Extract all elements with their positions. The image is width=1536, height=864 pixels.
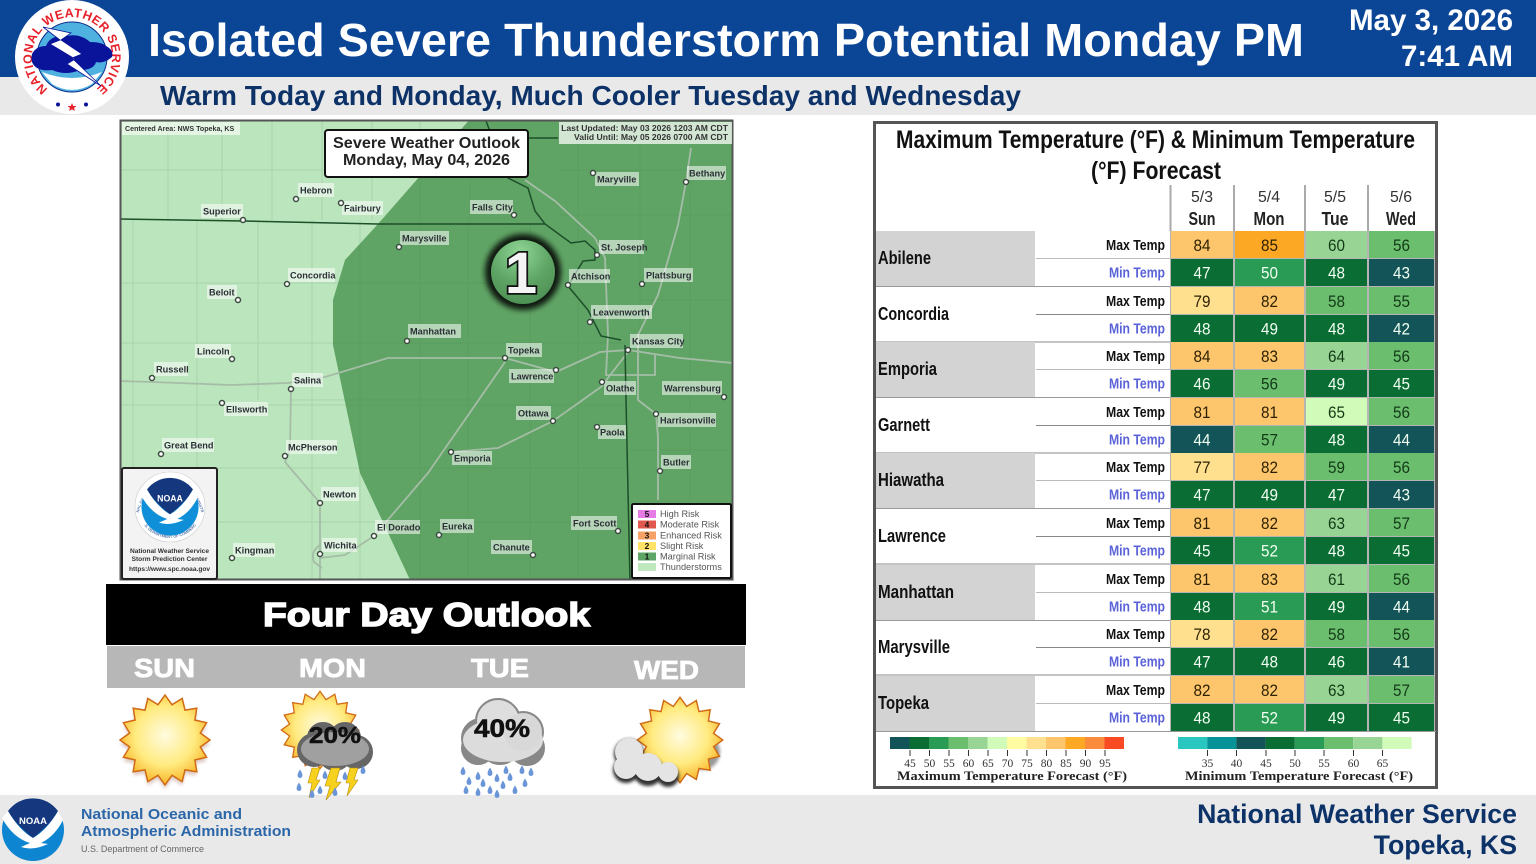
SPC NOAA logo box: U.S. DEPARTMENT OF COMMERCE bbox=[144, 524, 196, 538]
table row: Concordia: 49 bbox=[1261, 320, 1278, 338]
table row: Concordia: Min Temp bbox=[1109, 320, 1165, 338]
table row: Hiawatha: 47 bbox=[1328, 486, 1345, 504]
table row: Lawrence: Min Temp bbox=[1109, 542, 1165, 560]
map legend: Thunderstorms bbox=[660, 562, 722, 572]
table row: Topeka: 45 bbox=[1393, 708, 1410, 728]
table row: Manhattan: 81 bbox=[1194, 570, 1210, 589]
table row: Garnett: 81 bbox=[1194, 403, 1210, 422]
table column headers: 5/4 bbox=[1258, 189, 1280, 206]
city labels: Newton bbox=[323, 490, 357, 500]
city labels: Fort Scott bbox=[573, 518, 616, 528]
table row: Concordia: 48 bbox=[1194, 320, 1210, 338]
day labels band: MON bbox=[299, 653, 366, 683]
city labels: Superior bbox=[203, 206, 241, 216]
legend: maximum temperature colour scale: 75 bbox=[1021, 758, 1033, 770]
table row: Emporia: 56 bbox=[1261, 374, 1278, 394]
NOAA agency name bbox=[81, 806, 291, 854]
table row: Topeka bbox=[876, 676, 1436, 732]
table row: Garnett: 48 bbox=[1328, 430, 1345, 450]
date and time: May 3, 2026 bbox=[1349, 4, 1513, 37]
panel: severe weather outlook map bbox=[120, 120, 734, 580]
table row: Garnett: Max Temp bbox=[1106, 404, 1165, 421]
table row: Hiawatha: 82 bbox=[1261, 458, 1278, 477]
icon: NOAA footer logo bbox=[2, 798, 64, 861]
National Weather Service office name bbox=[1197, 799, 1517, 860]
table row: Garnett: 65 bbox=[1328, 403, 1345, 422]
table row: Lawrence: 48 bbox=[1328, 542, 1345, 560]
table row: Hiawatha: 77 bbox=[1194, 458, 1210, 477]
legend: minimum temperature colour scale: 65 bbox=[1377, 758, 1388, 770]
city labels: Falls City bbox=[472, 202, 514, 212]
table row: Marysville: Marysville bbox=[878, 637, 950, 657]
table row: Topeka: 52 bbox=[1261, 708, 1278, 728]
map legend: 3 bbox=[645, 530, 650, 540]
city labels: St. Joseph bbox=[601, 242, 648, 252]
table row: Hiawatha: 43 bbox=[1393, 486, 1410, 504]
table row: Emporia: Max Temp bbox=[1106, 348, 1165, 365]
table row: Concordia: 82 bbox=[1261, 292, 1278, 311]
centered area label bbox=[122, 122, 240, 135]
risk level 1 badge: 1 bbox=[505, 241, 537, 306]
table row: Topeka: Min Temp bbox=[1109, 710, 1165, 726]
interstate highways bbox=[120, 148, 733, 580]
SPC NOAA logo box: NOAA bbox=[157, 493, 184, 503]
city labels: Emporia bbox=[454, 454, 492, 464]
city labels: Harrisonville bbox=[660, 416, 716, 426]
legend: maximum temperature colour scale: 70 bbox=[1002, 758, 1014, 770]
table row: Manhattan: 83 bbox=[1261, 570, 1278, 589]
city labels: Marysville bbox=[402, 234, 446, 244]
table row: Emporia: 46 bbox=[1194, 374, 1210, 394]
legend: maximum temperature colour scale: 60 bbox=[963, 758, 974, 770]
day labels band: WED bbox=[634, 655, 699, 685]
table row: Garnett: 44 bbox=[1194, 430, 1210, 450]
icon: Monday thunderstorm 20% bbox=[281, 691, 372, 800]
legend: maximum temperature colour scale bbox=[890, 737, 1127, 783]
legend: maximum temperature colour scale: 80 bbox=[1041, 758, 1052, 770]
table title: Maximum Temperature (°F) & Minimum Temperature bbox=[896, 126, 1415, 154]
table row: Garnett: 57 bbox=[1261, 430, 1278, 450]
legend: minimum temperature colour scale: 35 bbox=[1202, 758, 1214, 770]
day labels band bbox=[107, 646, 745, 688]
icon: Sunday sunny bbox=[120, 695, 210, 789]
table row: Concordia: Max Temp bbox=[1106, 293, 1165, 310]
table row: Topeka: 63 bbox=[1328, 681, 1345, 700]
table row: Garnett: 44 bbox=[1393, 430, 1410, 450]
city labels: Beloit bbox=[209, 288, 235, 298]
legend: maximum temperature colour scale: 85 bbox=[1060, 758, 1072, 770]
map title box bbox=[325, 130, 528, 177]
city labels: McPherson bbox=[288, 442, 338, 452]
table column headers: 5/6 bbox=[1390, 189, 1412, 206]
subtitle: Warm Today and Monday, Much Cooler Tuesday and Wednesday bbox=[160, 80, 1021, 111]
city labels: Fairbury bbox=[344, 204, 382, 214]
table column headers bbox=[1170, 185, 1416, 231]
table row: Emporia: 49 bbox=[1328, 374, 1345, 394]
table row: Lawrence: Lawrence bbox=[878, 526, 946, 546]
table row: Lawrence: 63 bbox=[1328, 514, 1345, 533]
table row: Abilene: Abilene bbox=[878, 248, 931, 268]
state borders bbox=[120, 121, 630, 582]
last updated label: Last Updated: May 03 2026 1203 AM CDT bbox=[561, 123, 729, 133]
table row: Emporia bbox=[876, 342, 1434, 398]
table row: Marysville: 46 bbox=[1328, 652, 1345, 672]
city labels: Maryville bbox=[597, 174, 636, 184]
table column headers: Sun bbox=[1188, 209, 1216, 229]
SPC NOAA logo box: NATIONAL OCEANIC AND ATMOSPHERIC ADMINISTRATION bbox=[136, 496, 204, 512]
city labels bbox=[150, 166, 726, 560]
table row: Marysville: 47 bbox=[1194, 652, 1210, 672]
table row: Concordia: 55 bbox=[1393, 292, 1410, 311]
date and time: 7:41 AM bbox=[1401, 40, 1513, 73]
map frame bbox=[120, 120, 732, 580]
table row: Manhattan: Manhattan bbox=[878, 582, 954, 602]
table row: Garnett: 81 bbox=[1261, 403, 1278, 422]
table row: Hiawatha bbox=[876, 453, 1434, 508]
table row: Lawrence bbox=[876, 509, 1434, 564]
table row: Marysville: 56 bbox=[1393, 625, 1410, 644]
table column headers: 5/3 bbox=[1191, 189, 1213, 206]
icon: Wednesday mostly sunny bbox=[613, 697, 723, 787]
table row: Lawrence: 45 bbox=[1194, 542, 1210, 560]
map legend: Marginal Risk bbox=[660, 552, 716, 562]
table row: Abilene: 48 bbox=[1328, 264, 1345, 282]
panel: temperature forecast table bbox=[874, 122, 1436, 788]
legend: minimum temperature colour scale: 45 bbox=[1260, 758, 1272, 770]
city labels: Concordia bbox=[290, 270, 336, 280]
table row: Abilene: 56 bbox=[1393, 236, 1410, 255]
legend: minimum temperature colour scale bbox=[1178, 737, 1413, 783]
map legend: High Risk bbox=[660, 509, 700, 519]
table row: Emporia: 56 bbox=[1393, 347, 1410, 366]
table row: Manhattan: 61 bbox=[1328, 570, 1345, 589]
table row: Hiawatha: 56 bbox=[1393, 458, 1410, 477]
table row: Abilene: 85 bbox=[1261, 236, 1278, 255]
legend: maximum temperature colour scale: 55 bbox=[943, 758, 955, 770]
table row: Concordia: 58 bbox=[1328, 292, 1345, 311]
table row: Lawrence: 52 bbox=[1261, 542, 1278, 560]
table row: Topeka: Max Temp bbox=[1106, 682, 1165, 699]
icon: NOAA footer logo: NOAA bbox=[19, 816, 47, 827]
table row: Manhattan: 44 bbox=[1393, 598, 1410, 616]
legend: maximum temperature colour scale: 65 bbox=[982, 758, 994, 770]
table row: Concordia bbox=[876, 287, 1434, 342]
map legend: Moderate Risk bbox=[660, 520, 720, 530]
city labels: Butler bbox=[663, 458, 690, 468]
footer band bbox=[0, 795, 1536, 864]
table row: Abilene: 43 bbox=[1393, 264, 1410, 282]
NOAA agency name: Atmospheric Administration bbox=[81, 823, 291, 840]
table row: Manhattan: 51 bbox=[1261, 598, 1278, 616]
table row: Concordia: 48 bbox=[1328, 320, 1345, 338]
table row: Manhattan bbox=[876, 565, 1434, 620]
icon: Tuesday rain 40%: 40% bbox=[474, 715, 530, 743]
SPC NOAA logo box: Storm Prediction Center bbox=[132, 556, 208, 563]
city labels: Great Bend bbox=[164, 440, 214, 450]
table row: Garnett: 56 bbox=[1393, 403, 1410, 422]
table row: Abilene: 84 bbox=[1194, 236, 1210, 255]
table row: Emporia: Emporia bbox=[878, 359, 938, 379]
map legend: 1 bbox=[645, 552, 650, 562]
legend: minimum temperature colour scale: 55 bbox=[1318, 758, 1330, 770]
table row: Abilene: Min Temp bbox=[1109, 264, 1165, 282]
table row: Abilene: 47 bbox=[1194, 264, 1210, 282]
table row: Manhattan: 49 bbox=[1328, 598, 1345, 616]
map legend: 5 bbox=[645, 509, 650, 519]
table row: Topeka: Topeka bbox=[878, 693, 930, 713]
table row: Concordia: Concordia bbox=[878, 304, 950, 324]
city labels: Lincoln bbox=[197, 346, 230, 356]
day labels band: SUN bbox=[134, 653, 195, 683]
map legend: 2 bbox=[645, 541, 650, 551]
city labels: Plattsburg bbox=[646, 270, 691, 280]
table row: Topeka: 82 bbox=[1261, 681, 1278, 700]
table row: Marysville: Max Temp bbox=[1106, 626, 1165, 643]
centered area label: Centered Area: NWS Topeka, KS bbox=[125, 125, 234, 133]
table row: Marysville: 78 bbox=[1194, 625, 1210, 644]
map title box: Severe Weather Outlook bbox=[333, 135, 520, 152]
city labels: Wichita bbox=[324, 540, 357, 550]
last updated label: Valid Until: May 05 2026 0700 AM CDT bbox=[574, 132, 729, 142]
table row: Manhattan: Min Temp bbox=[1109, 598, 1165, 616]
city labels: Olathe bbox=[606, 384, 635, 394]
icon: Tuesday rain 40% bbox=[461, 699, 544, 798]
table row: Manhattan: 48 bbox=[1194, 598, 1210, 616]
map legend bbox=[632, 504, 731, 578]
table row: Hiawatha: Hiawatha bbox=[878, 470, 945, 490]
table row: Hiawatha: 59 bbox=[1328, 458, 1345, 477]
heading: four day outlook: Four Day Outlook bbox=[263, 596, 591, 633]
table row: Garnett: Garnett bbox=[878, 415, 930, 435]
SPC NOAA logo box bbox=[121, 467, 218, 580]
city labels: Eureka bbox=[442, 522, 474, 532]
city labels: Kansas City bbox=[632, 336, 685, 346]
city labels: Topeka bbox=[508, 346, 540, 356]
table row: Topeka: 49 bbox=[1328, 708, 1345, 728]
NOAA agency name: U.S. Department of Commerce bbox=[81, 844, 204, 854]
day labels band: TUE bbox=[471, 653, 529, 683]
table row: Marysville bbox=[876, 620, 1434, 675]
table row: Garnett bbox=[876, 398, 1434, 453]
date and time bbox=[1349, 4, 1513, 73]
table row: Abilene bbox=[876, 231, 1434, 286]
city labels: Manhattan bbox=[410, 326, 456, 336]
table column headers: Tue bbox=[1322, 209, 1348, 229]
table row: Lawrence: 81 bbox=[1194, 514, 1210, 533]
city labels: Bethany bbox=[689, 168, 726, 178]
last updated label bbox=[559, 122, 732, 144]
NOAA agency name: National Oceanic and bbox=[81, 806, 242, 823]
legend: minimum temperature colour scale: 60 bbox=[1348, 758, 1360, 770]
table row: Abilene: 50 bbox=[1261, 264, 1278, 282]
city labels: Leavenworth bbox=[593, 308, 650, 318]
legend: maximum temperature colour scale: 50 bbox=[924, 758, 936, 770]
National Weather Service office name: Topeka, KS bbox=[1374, 830, 1517, 860]
city labels: Salina bbox=[294, 376, 322, 386]
marginal risk area bbox=[333, 118, 735, 582]
table row: Manhattan: Max Temp bbox=[1106, 571, 1165, 588]
map legend: 4 bbox=[645, 520, 650, 530]
table row: Manhattan: 56 bbox=[1393, 570, 1410, 589]
city labels: Russell bbox=[156, 364, 189, 374]
table row: Abilene: 60 bbox=[1328, 236, 1345, 255]
table row: Hiawatha: Min Temp bbox=[1109, 486, 1165, 504]
map legend: Enhanced Risk bbox=[660, 530, 722, 540]
city labels: Warrensburg bbox=[664, 384, 721, 394]
table row: Lawrence: 82 bbox=[1261, 514, 1278, 533]
table row: Lawrence: Max Temp bbox=[1106, 515, 1165, 532]
city labels: El Dorado bbox=[377, 522, 421, 532]
map legend: Slight Risk bbox=[660, 541, 704, 551]
table row: Marysville: 41 bbox=[1393, 652, 1410, 672]
risk level 1 badge bbox=[485, 234, 561, 310]
table row: Emporia: 45 bbox=[1393, 374, 1410, 394]
table row: Hiawatha: 49 bbox=[1261, 486, 1278, 504]
table title bbox=[896, 126, 1415, 185]
legend: minimum temperature colour scale: 50 bbox=[1289, 758, 1301, 770]
table row: Concordia: 79 bbox=[1194, 292, 1210, 311]
city labels: Atchison bbox=[571, 272, 611, 282]
city labels: Ottawa bbox=[518, 408, 550, 418]
table column headers: 5/5 bbox=[1324, 189, 1346, 206]
table row: Emporia: 84 bbox=[1194, 347, 1210, 366]
city labels: Hebron bbox=[300, 186, 333, 196]
legend: minimum temperature colour scale: Minimum Temperature Forecast (°F) bbox=[1185, 768, 1413, 783]
title: Isolated Severe Thunderstorm Potential Monday PM bbox=[148, 14, 1304, 66]
table row: Lawrence: 57 bbox=[1393, 514, 1410, 533]
legend: maximum temperature colour scale: 45 bbox=[904, 758, 916, 770]
legend: maximum temperature colour scale: 95 bbox=[1099, 758, 1111, 770]
icon: National Weather Service logo: NATIONAL WEATHER SERVICE bbox=[23, 8, 121, 95]
table row: Marysville: Min Temp bbox=[1109, 654, 1165, 670]
city labels: Ellsworth bbox=[226, 404, 268, 414]
legend: maximum temperature colour scale: Maximum Temperature Forecast (°F) bbox=[897, 768, 1127, 783]
table row: Lawrence: 45 bbox=[1393, 542, 1410, 560]
table row: Concordia: 42 bbox=[1393, 320, 1410, 338]
SPC NOAA logo box: https://www.spc.noaa.gov bbox=[129, 566, 210, 573]
table row: Topeka: 82 bbox=[1194, 681, 1210, 700]
table row: Garnett: Min Temp bbox=[1109, 432, 1165, 448]
city labels: Lawrence bbox=[511, 372, 553, 382]
subheader band bbox=[0, 77, 1536, 115]
table row: Marysville: 48 bbox=[1261, 652, 1278, 672]
table row: Topeka: 48 bbox=[1194, 708, 1210, 728]
map title box: Monday, May 04, 2026 bbox=[343, 152, 510, 169]
table title: (°F) Forecast bbox=[1091, 157, 1222, 185]
legend: maximum temperature colour scale: 90 bbox=[1080, 758, 1092, 770]
city labels: Paola bbox=[600, 428, 625, 438]
SPC NOAA logo box: National Weather Service bbox=[130, 548, 209, 555]
table row: Emporia: Min Temp bbox=[1109, 376, 1165, 392]
header band bbox=[0, 0, 1536, 77]
city labels: Chanute bbox=[493, 542, 530, 552]
table row: Hiawatha: Max Temp bbox=[1106, 459, 1165, 476]
table column headers: Mon bbox=[1254, 209, 1284, 229]
National Weather Service office name: National Weather Service bbox=[1197, 799, 1517, 829]
heading: four day outlook bbox=[106, 584, 746, 645]
city labels: Kingman bbox=[235, 546, 275, 556]
table column headers: Wed bbox=[1386, 209, 1416, 229]
table row: Abilene: Max Temp bbox=[1106, 237, 1165, 254]
table row: Topeka: 57 bbox=[1393, 681, 1410, 700]
table row: Marysville: 58 bbox=[1328, 625, 1345, 644]
table row: Emporia: 83 bbox=[1261, 347, 1278, 366]
icon: Monday thunderstorm 20%: 20% bbox=[309, 722, 361, 748]
table row: Marysville: 82 bbox=[1261, 625, 1278, 644]
table row: Hiawatha: 47 bbox=[1194, 486, 1210, 504]
legend: minimum temperature colour scale: 40 bbox=[1231, 758, 1242, 770]
table row: Emporia: 64 bbox=[1328, 347, 1345, 366]
